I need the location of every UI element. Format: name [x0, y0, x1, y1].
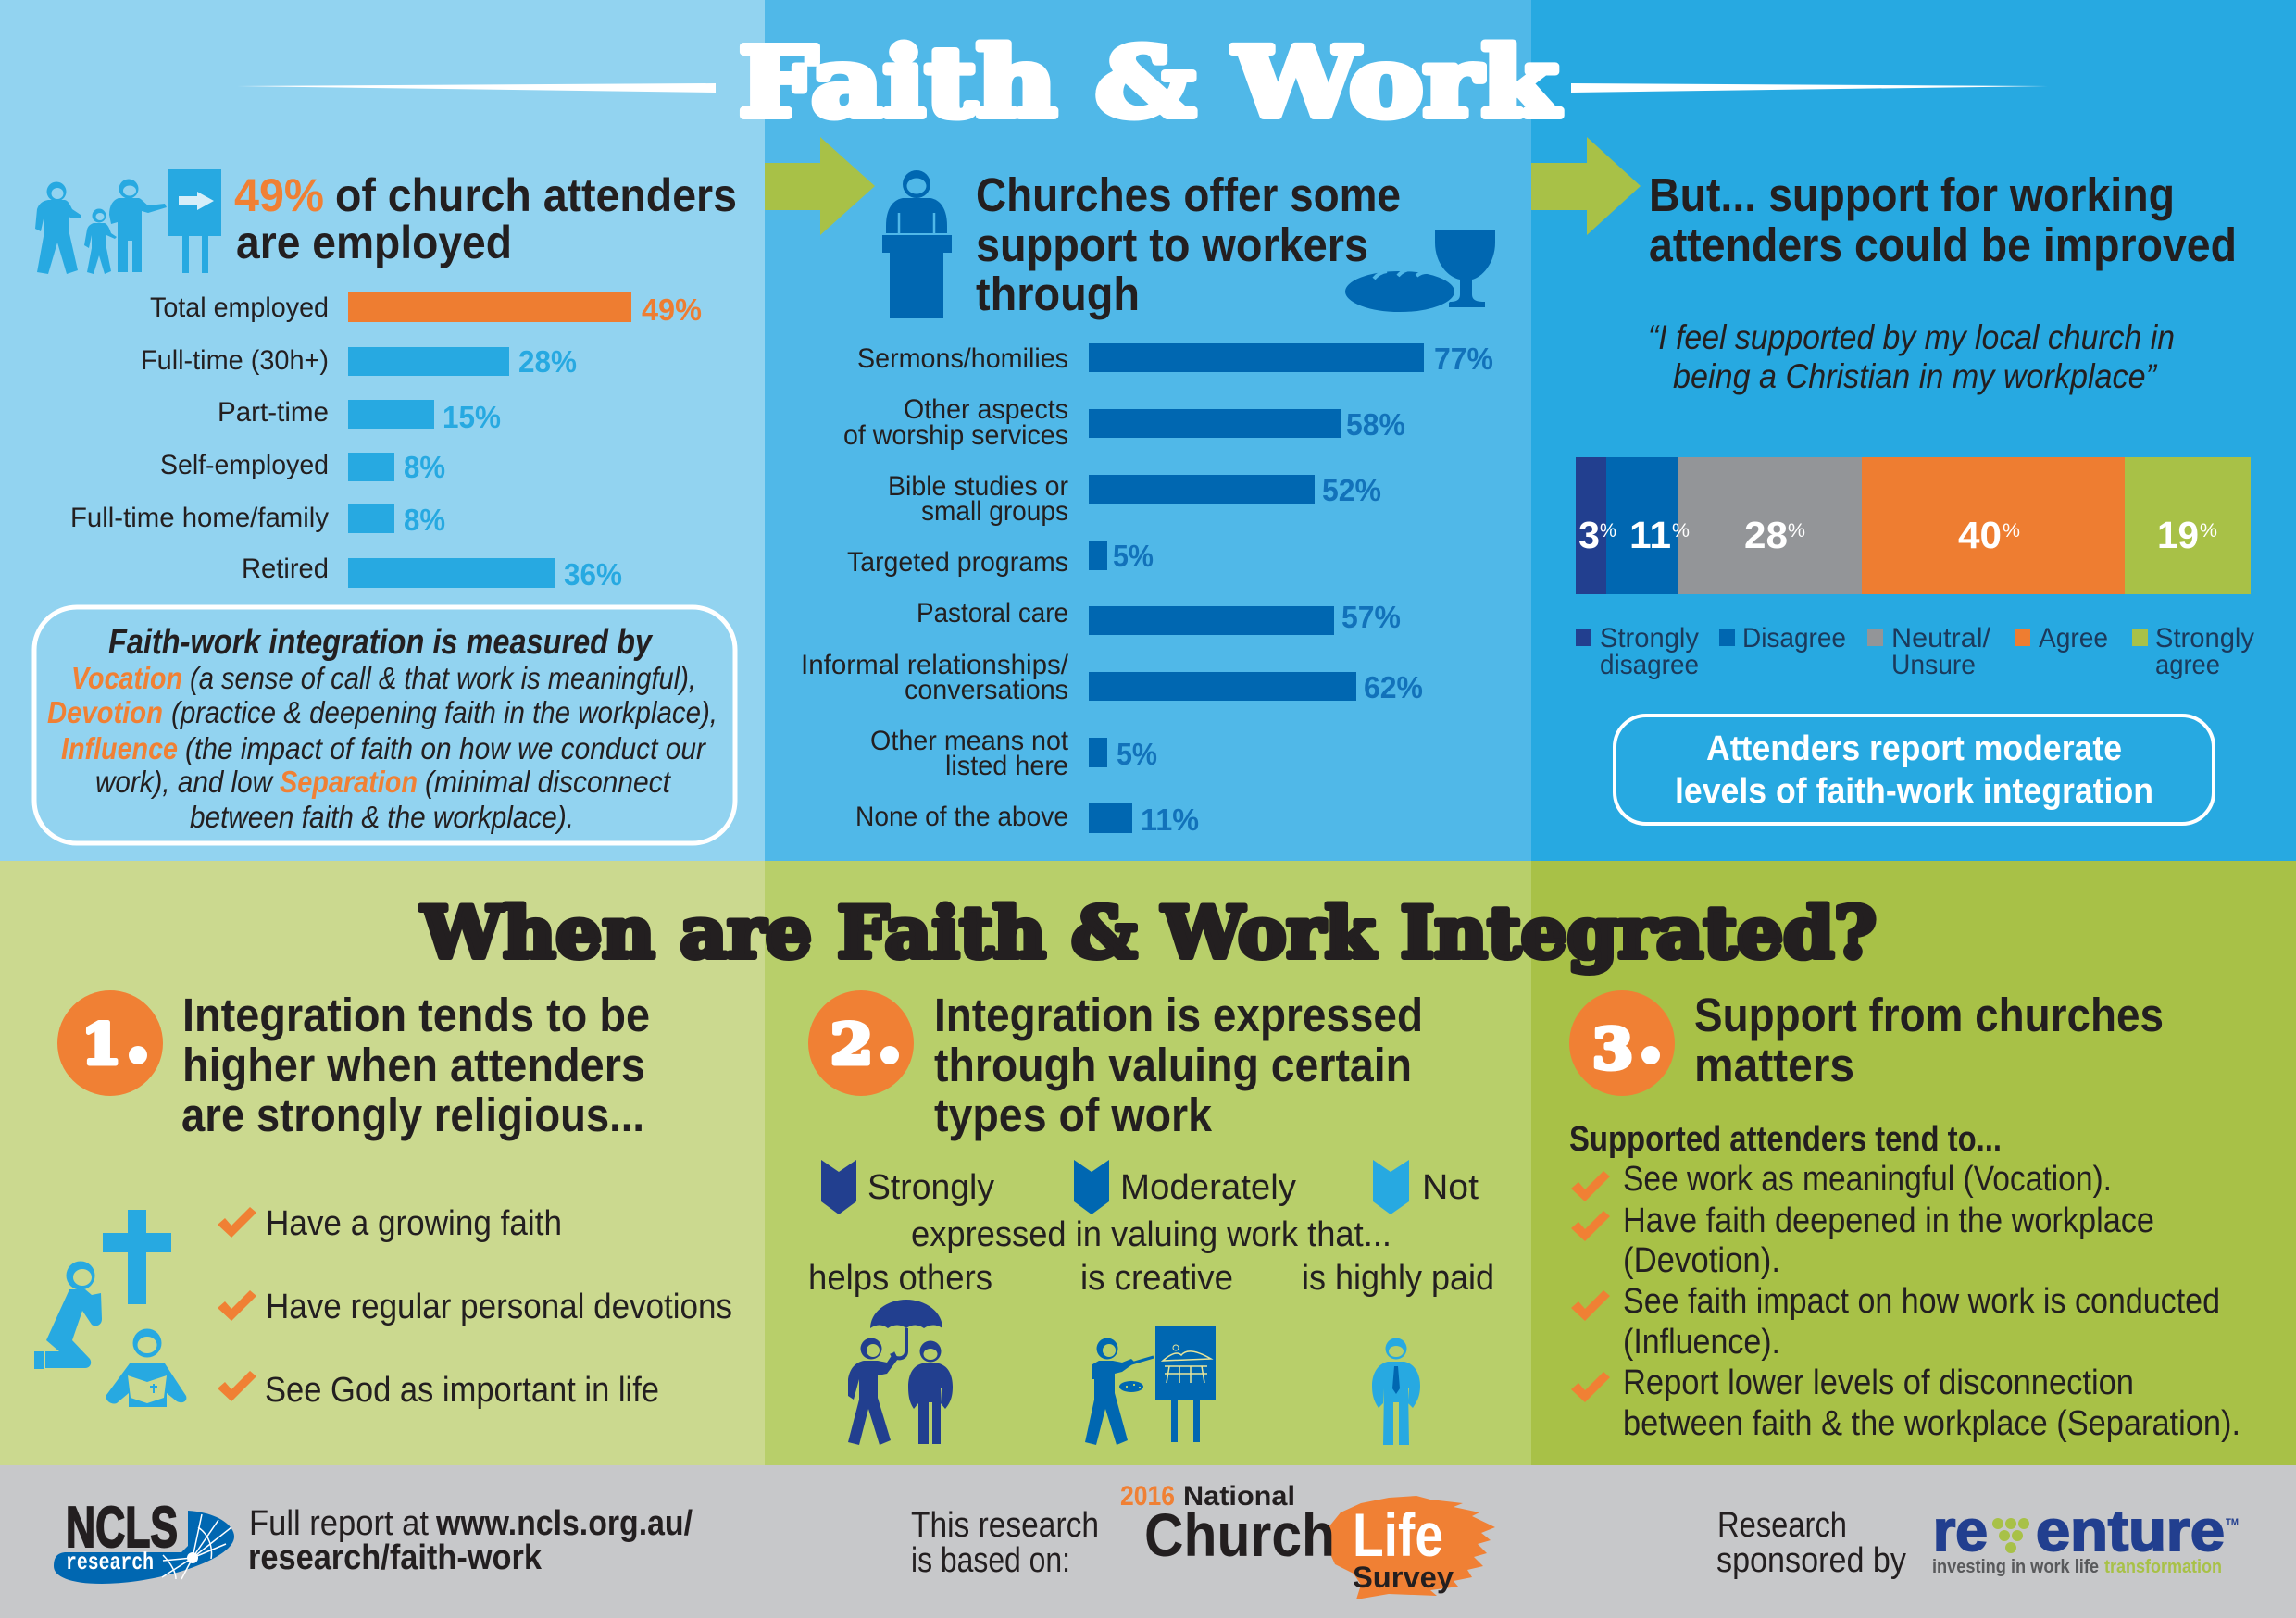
- callout: moderate integration: [1615, 716, 2214, 824]
- bar chart: support channels: Targeted programs: [847, 547, 1068, 578]
- legend: expression levels: Moderately: [1120, 1168, 1296, 1207]
- bar chart: support channels: 62%: [1364, 670, 1423, 704]
- checklist: religious signs: Have a growing faith: [266, 1204, 562, 1243]
- bar chart: support channels: Other means not: [870, 726, 1069, 756]
- legend: agree: [2155, 650, 2220, 680]
- quote: being a Christian in my workplace”: [1673, 357, 2158, 395]
- logo: reventure: investing in work life: [1932, 1557, 2099, 1577]
- bar chart: support channels: conversations: [905, 675, 1068, 705]
- text: research basis: [911, 1506, 1099, 1580]
- checklist: supported attenders: See faith impact on how work is conducted: [1623, 1282, 2220, 1321]
- panel: church support matters: [1531, 861, 2296, 1465]
- logo: reventure: re: [1933, 1500, 1988, 1563]
- text: expressed in valuing work: helps others: [808, 1259, 992, 1298]
- bar chart: support channels: 52%: [1322, 473, 1381, 507]
- checklist: supported attenders: Report lower levels of disconnection: [1623, 1363, 2134, 1402]
- quote: [1648, 318, 2175, 395]
- heading: support could be improved: [1649, 168, 2237, 271]
- bar chart: employment status: Full-time home/family: [70, 503, 329, 533]
- bar chart: support channels: Sermons/homilies: [857, 343, 1068, 374]
- icon: people under umbrella: [848, 1300, 953, 1445]
- bar chart: support channels: Informal relationships/: [801, 650, 1069, 680]
- panel: strongly religious: [0, 861, 765, 1465]
- legend: expression levels: [821, 1160, 1479, 1214]
- panel: footer: [0, 1465, 2296, 1618]
- callout: faith-work integration measures: [34, 607, 735, 843]
- bar chart: employment status: Part-time: [218, 397, 329, 428]
- bar chart: support channels: small groups: [921, 496, 1068, 527]
- text: full report link: Full report at: [249, 1504, 429, 1543]
- bar chart: support channels: 11%: [1141, 803, 1199, 837]
- icon: prayer and cross: [34, 1210, 186, 1407]
- logo: reventure: [1932, 1500, 2239, 1577]
- checklist: supported attenders: between faith & the workplace (Separation).: [1623, 1404, 2240, 1443]
- bar chart: employment status: Total employed: [150, 292, 329, 323]
- bar chart: employment status: 8%: [404, 503, 445, 537]
- stacked bar chart: 40: [1958, 514, 2002, 556]
- heading: integration expressed: [934, 989, 1423, 1141]
- callout: faith-work integration measures: (minimal disconnect: [425, 765, 672, 799]
- callout: faith-work integration measures: Faith-work integration is measured by: [108, 623, 654, 662]
- callout: faith-work integration measures: (a sense of call & that work is meaningful),: [190, 661, 696, 695]
- heading: churches offer support: [976, 168, 1401, 320]
- heading: integration expressed: types of work: [934, 1089, 1213, 1141]
- stacked bar chart: 3: [1578, 514, 1600, 556]
- panel: church support: [765, 0, 1531, 861]
- legend: Agree: [2039, 623, 2108, 653]
- logo: reventure: transformation: [2104, 1557, 2222, 1577]
- bar chart: support channels: Pastoral care: [917, 598, 1068, 629]
- panel: support could be improved: [1531, 0, 2296, 861]
- callout: faith-work integration measures: work), and low: [95, 765, 274, 799]
- text: expressed in valuing work: is creative: [1080, 1259, 1233, 1298]
- logo: reventure: enture: [2036, 1500, 2225, 1563]
- legend: Strongly: [2155, 623, 2254, 653]
- bar chart: support channels: 58%: [1346, 407, 1405, 442]
- bar chart: employment status: 36%: [564, 557, 622, 591]
- checklist: religious signs: See God as important in life: [265, 1371, 659, 1410]
- stacked bar chart: %: [2003, 520, 2020, 541]
- text: expressed in valuing work: expressed in valuing work that...: [911, 1215, 1391, 1254]
- heading: 49% employed: of church attenders: [335, 169, 737, 221]
- checklist: supported attenders: [1569, 1120, 2240, 1443]
- icon: businessman: [1372, 1338, 1420, 1445]
- heading: integration higher when religious: Integration tends to be: [182, 989, 650, 1041]
- text: sponsorship: sponsored by: [1716, 1541, 1906, 1580]
- legend: Neutral/: [1891, 623, 1991, 653]
- bar chart: employment status: 28%: [518, 344, 577, 379]
- bar chart: support channels: 57%: [1341, 600, 1401, 634]
- heading: 49% employed: [234, 169, 737, 268]
- bar chart: employment status: Self-employed: [160, 450, 329, 480]
- heading: churches offer support: support to workers: [976, 218, 1368, 271]
- bar chart: employment status: Retired: [242, 554, 329, 584]
- legend: [1576, 623, 2254, 680]
- bar chart: support channels: of worship services: [843, 420, 1068, 451]
- icon: family at sign: [35, 169, 221, 274]
- legend: expression levels: Strongly: [867, 1168, 994, 1207]
- badge: number 3: [1569, 990, 1675, 1096]
- stacked bar chart: 28: [1744, 514, 1788, 556]
- arrow: to improvement: [1531, 137, 1641, 235]
- bar chart: employment status: [70, 292, 702, 591]
- legend: expression levels: Not: [1422, 1168, 1479, 1207]
- heading: 49% employed: are employed: [236, 217, 512, 268]
- heading: churches offer support: Churches offer some: [976, 168, 1401, 221]
- checklist: supported attenders: (Influence).: [1623, 1323, 1780, 1362]
- logo: reventure: TM: [2226, 1517, 2239, 1528]
- bar chart: support channels: 77%: [1434, 342, 1493, 376]
- bar chart: employment status: 49%: [642, 292, 702, 327]
- heading: integration expressed: Integration is expressed: [934, 989, 1423, 1041]
- stacked bar chart: 19: [2157, 514, 2199, 556]
- stacked bar chart: [1576, 457, 2251, 594]
- icon: painter at easel: [1085, 1326, 1216, 1445]
- panel: valuing types of work: [765, 861, 1531, 1465]
- callout: faith-work integration measures: Separation: [280, 765, 418, 799]
- checklist: supported attenders: See work as meaningful (Vocation).: [1623, 1160, 2112, 1199]
- bar chart: employment status: Full-time (30h+): [141, 345, 329, 376]
- panel: attenders employed: [0, 0, 765, 861]
- callout: moderate integration: levels of faith-work integration: [1675, 772, 2153, 811]
- checklist: supported attenders: Supported attenders tend to...: [1569, 1120, 2002, 1159]
- logo: National Church Life Survey: 2016: [1120, 1481, 1175, 1512]
- heading: support could be improved: attenders could be improved: [1649, 218, 2237, 271]
- bar chart: support channels: 5%: [1117, 737, 1157, 771]
- bar chart: support channels: None of the above: [855, 802, 1068, 832]
- stacked bar chart: %: [1672, 520, 1690, 541]
- legend: Strongly: [1600, 623, 1699, 653]
- legend: Unsure: [1891, 650, 1976, 680]
- heading: support matters: matters: [1694, 1039, 1854, 1091]
- icon: bread and chalice: [1344, 230, 1495, 313]
- heading: 49% employed: 49%: [234, 169, 324, 221]
- badge: number 1: [57, 990, 163, 1096]
- bar chart: support channels: Bible studies or: [888, 471, 1068, 502]
- stacked bar chart: %: [2200, 520, 2217, 541]
- text: sponsorship: [1716, 1506, 1906, 1580]
- text: research basis: is based on:: [911, 1541, 1070, 1580]
- callout: faith-work integration measures: (the impact of faith on how we conduct our: [185, 731, 707, 765]
- checklist: religious signs: [218, 1204, 732, 1410]
- text: expressed in valuing work: [808, 1215, 1494, 1298]
- text: full report link: www.ncls.org.au/: [435, 1504, 693, 1543]
- text: full report link: research/faith-work: [248, 1538, 543, 1577]
- title: Faith & Work: [237, 27, 2048, 139]
- stacked bar chart: 11: [1629, 514, 1671, 556]
- heading: integration expressed: through valuing certain: [934, 1039, 1412, 1091]
- bar chart: support channels: [801, 342, 1493, 837]
- bar chart: employment status: 15%: [443, 400, 501, 434]
- text: sponsorship: Research: [1717, 1506, 1847, 1545]
- callout: faith-work integration measures: Devotion: [47, 695, 163, 729]
- checklist: supported attenders: Have faith deepened in the workplace: [1623, 1201, 2154, 1240]
- logo: National Church Life Survey: National: [1183, 1481, 1295, 1512]
- bar chart: support channels: listed here: [945, 751, 1068, 781]
- heading: support matters: Support from churches: [1694, 989, 2164, 1041]
- logo: National Church Life Survey: [1120, 1481, 1495, 1599]
- badge: number 1: 1: [81, 1013, 121, 1077]
- callout: faith-work integration measures: Vocation: [71, 661, 182, 695]
- bar chart: support channels: Other aspects: [904, 394, 1068, 425]
- heading: support could be improved: But... support for working: [1649, 168, 2175, 221]
- badge: number 2: 2: [830, 1013, 873, 1077]
- badge: number 3: 3: [1592, 1017, 1633, 1082]
- logo: NCLS research: [54, 1496, 234, 1584]
- icon: pastor at lectern: [882, 170, 952, 318]
- callout: faith-work integration measures: Influence: [61, 731, 178, 765]
- title: Faith & Work: Faith & Work: [739, 27, 1561, 139]
- bar chart: employment status: 8%: [404, 450, 445, 484]
- text: full report link: [248, 1504, 693, 1577]
- heading: integration higher when religious: higher when attenders: [182, 1039, 645, 1091]
- logo: NCLS research: research: [66, 1549, 154, 1576]
- callout: faith-work integration measures: (practice & deepening faith in the workplace),: [171, 695, 718, 729]
- stacked bar chart: %: [1600, 520, 1616, 541]
- text: expressed in valuing work: is highly paid: [1302, 1259, 1494, 1298]
- heading: integration higher when religious: are strongly religious...: [181, 1089, 644, 1141]
- checklist: supported attenders: (Devotion).: [1623, 1241, 1780, 1280]
- callout: moderate integration: Attenders report moderate: [1706, 729, 2122, 768]
- arrow: to church support: [765, 137, 875, 235]
- logo: NCLS research: NCLS: [66, 1496, 178, 1560]
- heading: support matters: [1694, 989, 2164, 1091]
- checklist: religious signs: Have regular personal devotions: [266, 1288, 732, 1326]
- heading: churches offer support: through: [976, 268, 1140, 320]
- heading: integration higher when religious: [181, 989, 650, 1141]
- text: research basis: This research: [911, 1506, 1099, 1545]
- logo: National Church Life Survey: Life: [1353, 1500, 1443, 1569]
- quote: “I feel supported by my local church in: [1648, 318, 2175, 356]
- bar chart: support channels: 5%: [1113, 539, 1154, 573]
- legend: disagree: [1600, 650, 1699, 680]
- logo: National Church Life Survey: Survey: [1353, 1561, 1454, 1594]
- badge: number 2: [808, 990, 914, 1096]
- legend: Disagree: [1742, 623, 1846, 653]
- title: When are Faith & Work Integrated?: When are Faith & Work Integrated?: [420, 891, 1877, 974]
- logo: National Church Life Survey: Church: [1144, 1500, 1335, 1569]
- stacked bar chart: %: [1788, 520, 1805, 541]
- callout: faith-work integration measures: between faith & the workplace).: [190, 800, 574, 834]
